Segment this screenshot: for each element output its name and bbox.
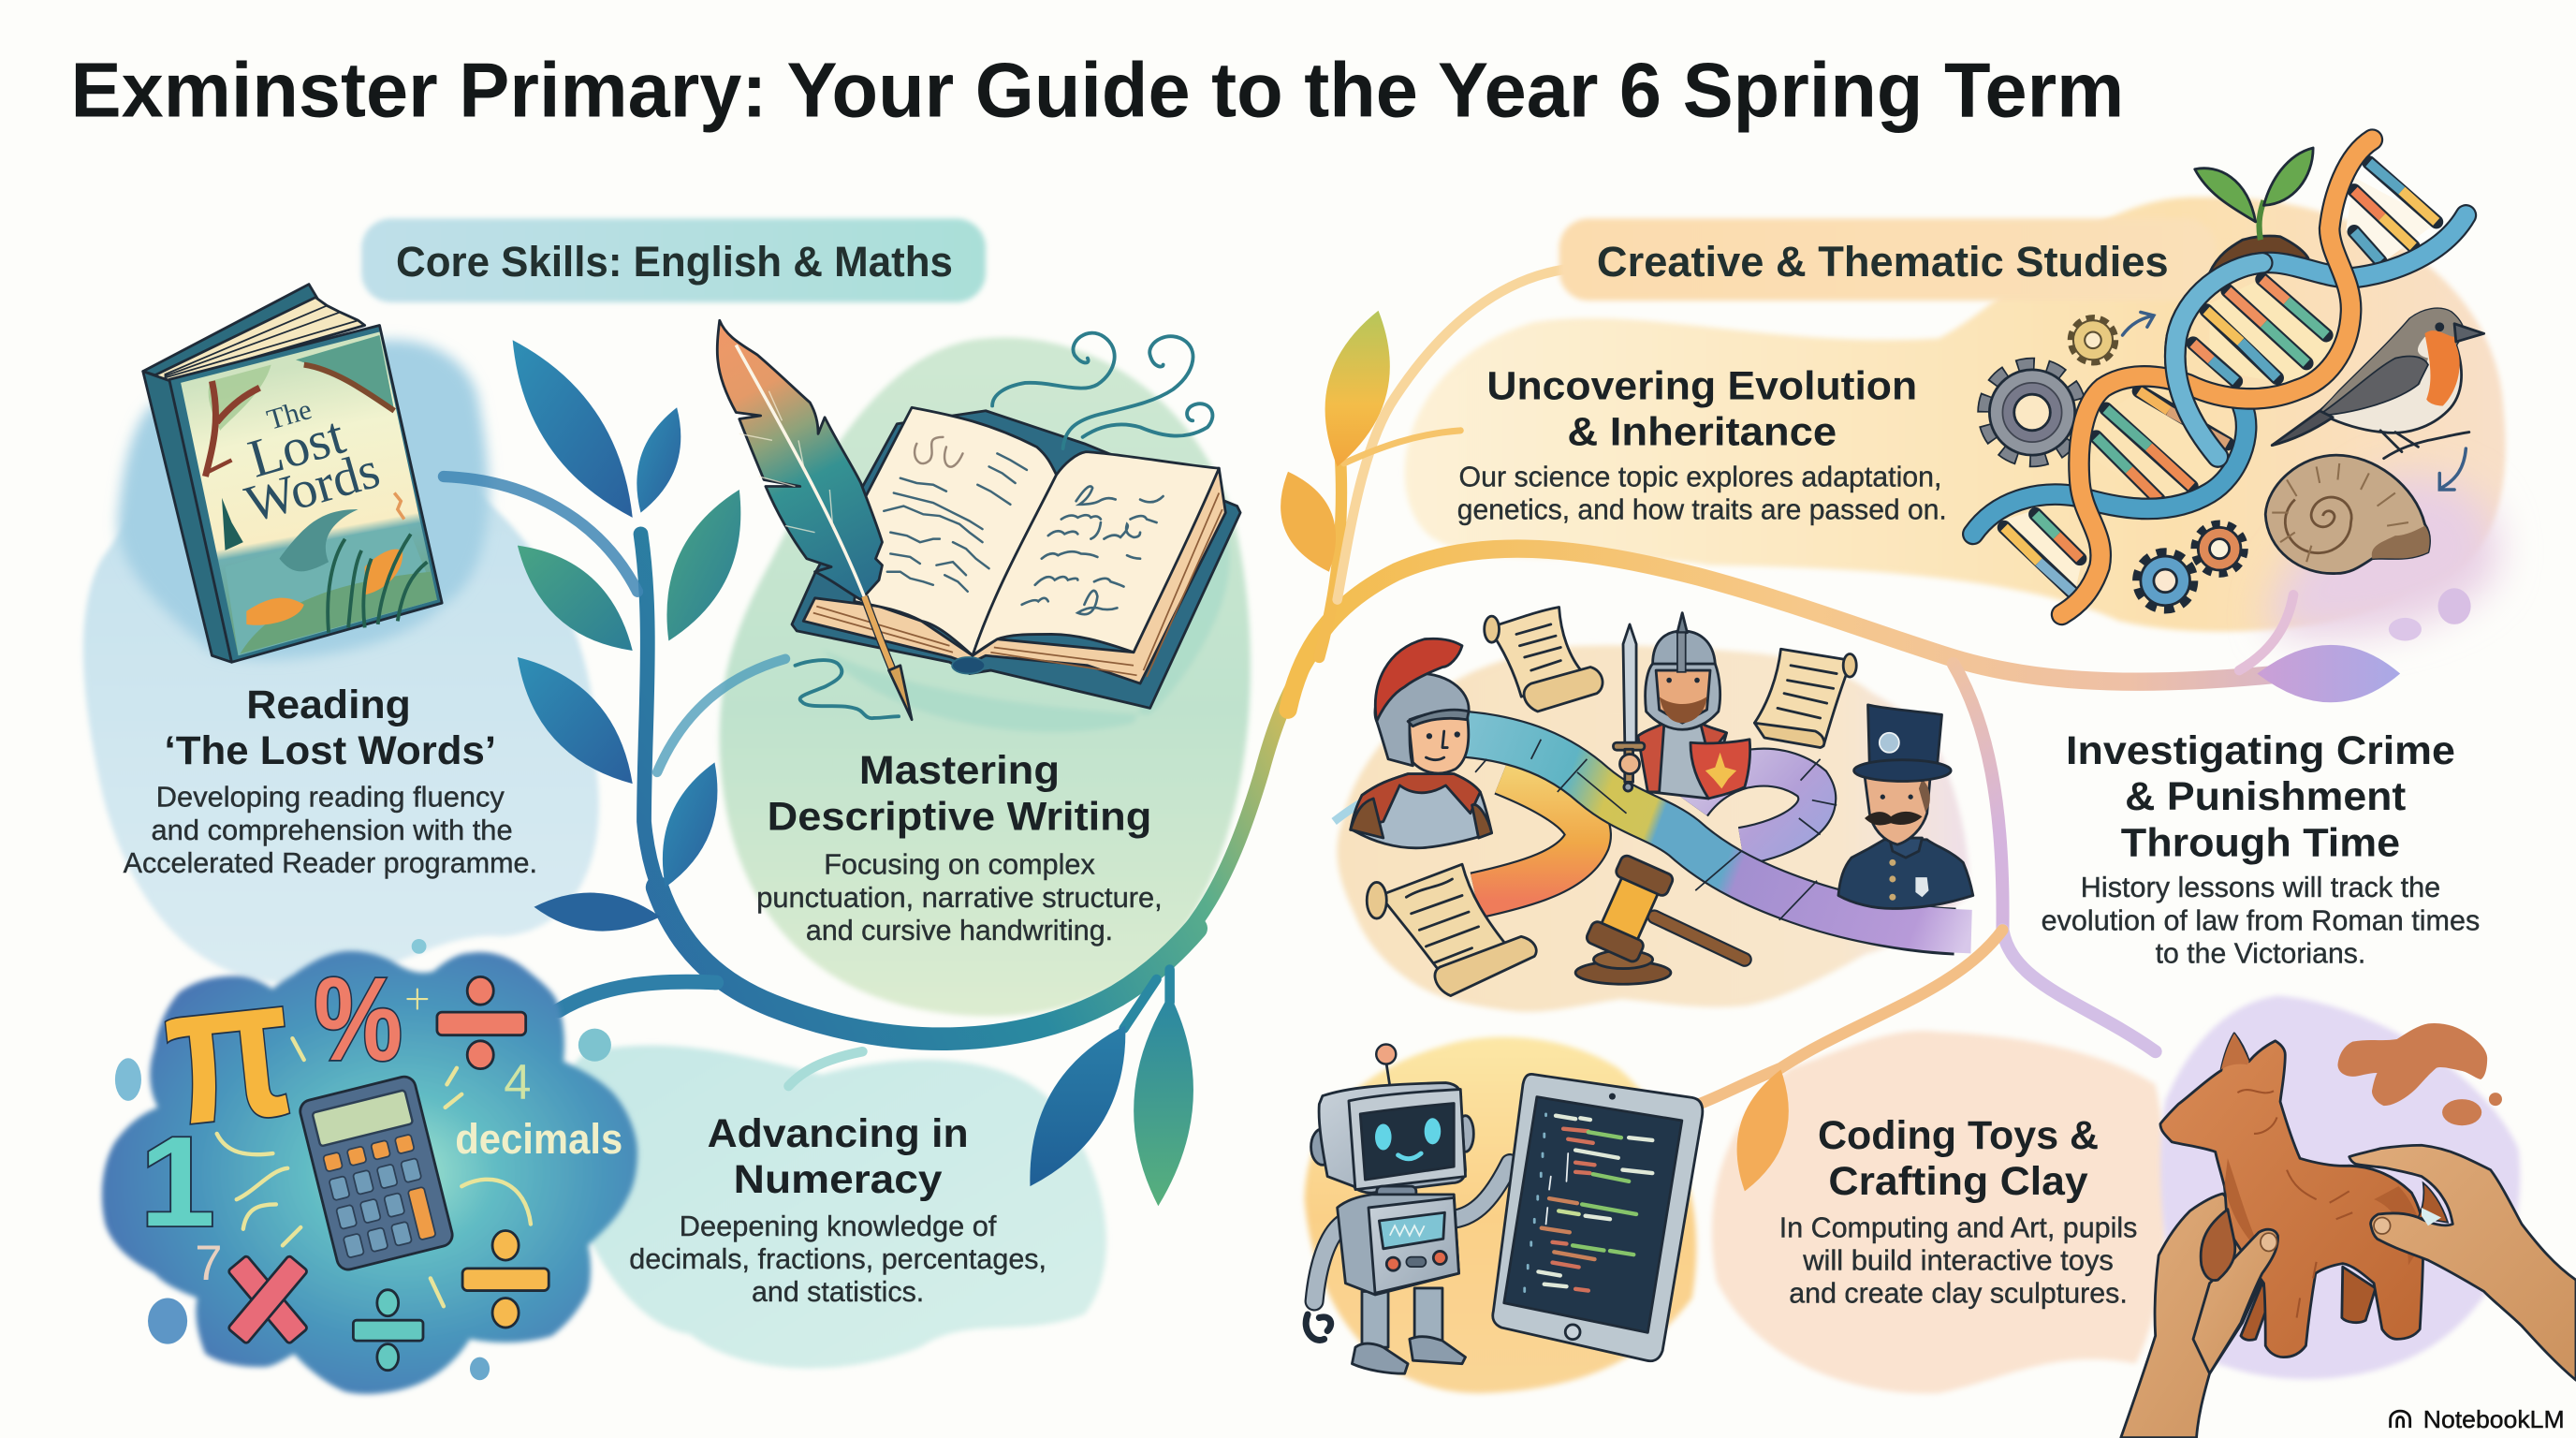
ammonite [2265,455,2430,574]
gap between fingers [2418,1183,2448,1223]
text: writing: Descriptive Writing [768,794,1151,839]
text: writing: punctuation, narrative structure, [756,881,1163,914]
text: crime: evolution of law from Roman times [2042,903,2480,936]
robot ears [1311,1116,1473,1165]
dna strand orange [2062,139,2372,614]
text: numeracy: Numeracy [734,1157,943,1202]
icon: robot [1306,1044,1510,1373]
left plant branches [444,477,1314,1086]
text: evolution: genetics, and how traits are passed on. [1457,493,1947,526]
book title: Words [240,441,386,535]
icon: history timeline scene [1334,607,1973,996]
page handwriting right [1022,486,1164,614]
gavel [1575,854,1745,984]
text: coding and clay: and create clay sculptures. [1789,1277,2128,1310]
panel: writing blob [720,338,1251,1016]
ink squiggles [795,333,1212,718]
panel: reading blob [83,340,599,983]
robot legs and feet [1352,1288,1466,1373]
plant leaves [513,340,1193,1206]
text: reading: ‘The Lost Words’ [165,728,496,773]
hidden horse legs [2241,1267,2376,1340]
text: evolution: & Inheritance [1567,410,1837,455]
red multiply [227,1255,308,1344]
text: evolution: Our science topic explores adaptation, [1459,460,1942,492]
gear small yellow [2071,318,2115,361]
text: coding and clay: In Computing and Art, pupils [1779,1211,2137,1244]
icon: DNA with gears, robin and fossil [1973,139,2484,614]
book title: Lost [242,404,351,490]
text: coding and clay: Coding Toys & [1818,1113,2099,1158]
math symbols: % [314,953,402,1085]
yellow division [462,1231,549,1328]
icon: calculator [298,1075,455,1272]
text: crime: & Punishment [2125,774,2406,819]
text: numeracy: Advancing in [708,1111,969,1156]
left hand [2121,1194,2276,1438]
book title [240,393,386,535]
right hand [2349,1145,2576,1380]
heading: core skills: Core Skills: English & Maths [396,238,953,286]
panel: clay blob [2160,996,2520,1379]
scroll top left [1485,607,1603,712]
text: writing: Mastering [859,748,1060,793]
warm branches [1288,270,2293,1104]
small sparks [217,990,531,1306]
text: reading: Developing reading fluency [156,781,505,814]
text: crime: to the Victorians. [2156,936,2365,969]
text: coding and clay: will build interactive toys [1802,1244,2114,1277]
text: coding and clay: Crafting Clay [1828,1159,2088,1204]
text: reading: Accelerated Reader programme. [124,846,537,879]
gear blue [2137,553,2193,609]
soil [2210,236,2308,272]
text: crime: Through Time [2121,820,2400,865]
scroll bottom left [1367,864,1536,996]
text: evolution [1457,363,1947,526]
faint numbers: 7 [195,1236,223,1291]
text: numeracy [629,1111,1046,1308]
arrows [2123,312,2466,490]
left thumb [2193,1229,2278,1373]
dna rung backing [1996,178,2438,600]
robot body [1338,1195,1459,1295]
text: evolution: Uncovering Evolution [1486,363,1917,408]
warm leaves [1281,311,2471,1191]
text: crime [2042,728,2480,969]
page handwriting left [884,437,1027,592]
feather [717,320,883,600]
math symbols: 1 [139,1110,215,1254]
panel: numeracy blob [563,1046,1106,1369]
timeline path [1334,734,1971,932]
victorian policeman [1838,705,1973,909]
panel: robot blob [1305,1037,1696,1393]
robin [2272,309,2484,459]
icon: clay horse with hands [2121,1023,2576,1438]
faint numbers: 4 [504,1055,532,1110]
book title: The [263,393,315,436]
math symbols [139,932,402,1254]
gear orange [2195,524,2244,574]
text: reading: and comprehension with the [152,814,513,846]
red division [437,976,526,1069]
clay scraps [2337,1023,2502,1125]
text: writing: Focusing on complex [824,848,1095,881]
text: crime: Investigating Crime [2066,728,2455,773]
faint numbers [195,1055,532,1291]
icon: tablet with code [1493,1074,1703,1361]
gear large [1983,364,2081,461]
text: writing: and cursive handwriting. [806,914,1113,946]
logo: NotebookLM: NotebookLM [2423,1407,2565,1433]
title: Exminster Primary: Your Guide to the Year 6 Spring Term [71,48,2124,134]
scroll top right [1754,649,1856,748]
text: reading [124,682,537,879]
text: reading: Reading [246,682,411,727]
text: numeracy: decimals, fractions, percentages, [629,1242,1046,1275]
text: crime: History lessons will track the [2081,871,2440,903]
icon: open book with quill [717,320,1240,720]
code lines [1525,1114,1652,1291]
pill: core skills [361,218,986,302]
knight [1613,613,1750,799]
text: writing [756,748,1163,946]
icon: The Lost Words book [143,285,442,662]
paint dots [115,939,611,1380]
math symbols: π [154,932,302,1168]
heading: creative studies: Creative & Thematic Studies [1597,238,2169,286]
icon: maths cloud [102,932,637,1394]
text: numeracy: Deepening knowledge of [680,1210,997,1242]
panel: coding blob [1712,1031,2167,1394]
robot head [1319,1083,1466,1193]
sprout [2195,148,2313,240]
panel: evolution blob [1405,198,2506,637]
clay horse [2160,1034,2423,1357]
decimals label: decimals [455,1115,622,1163]
text: numeracy: and statistics. [752,1275,924,1308]
pill: creative studies [1559,218,2217,301]
robot left arm [1314,1224,1342,1301]
teal division [353,1290,423,1371]
robot right arm [1454,1164,1510,1219]
book cover art [205,335,437,655]
dna strand blue [1973,215,2466,534]
panel: crime blob [1337,645,1969,1012]
text: coding and clay [1779,1113,2137,1310]
roman soldier [1351,638,1492,848]
dna rungs [2004,163,2437,594]
